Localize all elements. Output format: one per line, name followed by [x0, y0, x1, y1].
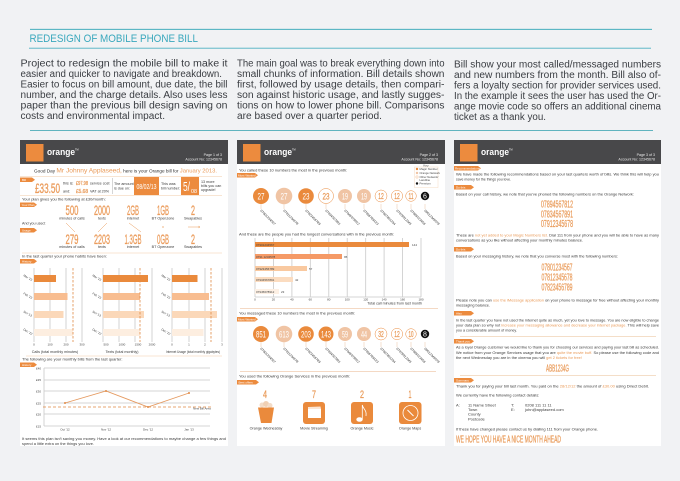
- text block: intro column 2: first, followed by usage details, then compari-: [237, 80, 444, 90]
- line chart: monthly bills: Nov '12: [101, 428, 111, 432]
- longest conversations intro: And these are the people you had the longest conversations with in the previous month:: [239, 232, 394, 236]
- bubble chart: most messaged numbers: 613: [279, 330, 289, 340]
- bubble chart: most messaged numbers: 32: [378, 330, 384, 339]
- bar chart: internet: Feb '13: [160, 291, 171, 300]
- closing text page 1: It seems this plan isn't saving you money. Have a look at our recommendations to maybe change a few things and: [22, 436, 226, 441]
- text block: intro column 3: and new numbers from the month. Bill also of-: [454, 70, 661, 81]
- bubble chart: most messaged numbers: 07911234578: [282, 347, 299, 364]
- contact details: 11 Name Street: [468, 402, 497, 408]
- line chart: monthly bills: £40: [36, 366, 41, 370]
- panel: bill page 3: WE HOPE YOU HAVE A NICE MONTH AHEAD: [456, 434, 561, 446]
- plan usage: texts: [98, 245, 106, 249]
- line chart: monthly bills: £35: [36, 378, 41, 382]
- upgrade note: upgrade!: [201, 188, 216, 192]
- tag: also: Also: [456, 312, 462, 316]
- contact details: Town: [468, 407, 477, 412]
- most messaged intro: You messaged these 10 numbers the most in the previous month:: [239, 310, 355, 316]
- contact details: 0208 111 11 11: [525, 402, 552, 408]
- bill charges: VAT at 20%: [90, 190, 110, 194]
- bubble chart: most called numbers: 23: [302, 192, 310, 202]
- bill charges: [63, 181, 110, 195]
- plan usage: 2: [191, 231, 195, 247]
- bubble chart: most messaged numbers: 07956789123: [362, 347, 380, 364]
- tag: your plan: [20, 202, 37, 207]
- bar chart: internet: [160, 268, 223, 354]
- loyalty text: We notice from your Orange Services usage that you are quite the movie buff. So please use the following code and: [456, 350, 659, 355]
- bar chart: texts: Texts (total monthly): [106, 350, 138, 354]
- bar chart: calls: Feb '13: [22, 291, 33, 300]
- bar chart: longest conversations: 57: [309, 267, 313, 271]
- header: page 3: orange: [481, 147, 509, 157]
- bubble chart: most messaged numbers: 09012345678: [423, 347, 441, 364]
- legend: key: Orange Network: [420, 171, 440, 175]
- bubble chart: most messaged numbers: 07945678912: [343, 347, 361, 364]
- header: page 1: [20, 140, 228, 164]
- imessage text: Please note you can use the iMessage application on your phone to message for free without affecting your monthly: [456, 298, 659, 302]
- contact details: E:: [511, 407, 515, 412]
- bar chart: calls: 100: [47, 342, 53, 346]
- text block: intro column 1: easier and quicker to navigate and breakdown.: [20, 69, 222, 80]
- magic numbers text: conversations as you like without affecting your monthly minutes balance.: [456, 238, 583, 242]
- plan usage: [59, 231, 202, 249]
- recommendations text: We have made the following recommendations based on your last quarters worth of bills. We think this will help you: [456, 172, 659, 176]
- header: page 3: [454, 140, 661, 164]
- bar chart: calls: 0: [33, 342, 35, 346]
- plan allowances: Swapables: [184, 216, 202, 220]
- bubble chart: most called numbers: 07967891234: [379, 209, 397, 226]
- plan usage: 2203: [94, 231, 110, 247]
- legend: key: Premium: [420, 182, 431, 186]
- service: orange wednesday: [250, 389, 283, 430]
- bar chart: longest conversations: 07901234567: [256, 243, 275, 247]
- due date: The amount: [114, 182, 134, 186]
- header: page 1: TM: [75, 148, 79, 152]
- legend: key: Landline: [420, 178, 431, 182]
- bar chart: internet: Dec '12: [160, 327, 172, 336]
- tag: also: [454, 311, 474, 316]
- service: orange wednesday: 4: [263, 389, 267, 401]
- text block: intro column 1: number, and the charge details. Also uses less: [20, 90, 228, 101]
- bubble chart: most called numbers: 27: [280, 192, 288, 202]
- plan usage: internet: [127, 245, 139, 249]
- tag: best offers: Best offers: [238, 380, 253, 384]
- text block: intro column 2: The main goal was to break everything down into: [237, 58, 445, 70]
- legend: key: Key: [423, 164, 429, 168]
- loyalty text: [456, 344, 659, 360]
- service: orange music: 2: [360, 389, 364, 401]
- bubble chart: most messaged numbers: 07978912345: [395, 347, 413, 364]
- service: movie streaming: Movie Streaming: [300, 426, 328, 430]
- text block: intro column 1: [20, 58, 228, 122]
- tag: best offers: [237, 380, 259, 384]
- loyalty text: the next Wednesday you are in the cinema you will get 2 tickets for free!: [456, 355, 582, 360]
- text block: intro column 3: Bill show your most called/messaged numbers: [454, 60, 661, 70]
- text block: intro column 1: costs and environmental impact.: [20, 111, 165, 122]
- recommendations text: save money for the things you love.: [456, 176, 511, 182]
- bar chart: texts: Jan '13: [92, 309, 102, 318]
- bill number: [161, 177, 199, 195]
- bar chart: internet: 2: [204, 342, 206, 346]
- suggested numbers 2: 07823456789: [542, 282, 573, 294]
- bar chart: internet: 1: [188, 342, 190, 346]
- used intro: And you used:: [22, 222, 46, 226]
- bubble chart: most messaged numbers: 07901234567: [259, 347, 277, 364]
- bubble chart: most messaged numbers: 07967891234: [379, 347, 397, 364]
- legend: key: [414, 164, 440, 188]
- bar chart: longest conversations: 80: [327, 298, 331, 302]
- bar chart: longest conversations: 95: [344, 255, 348, 259]
- suggested numbers 1: [541, 200, 573, 230]
- bubble chart: most messaged numbers: 07934567891: [324, 347, 342, 364]
- upgrade note: [201, 180, 221, 192]
- line chart: monthly bills: [36, 366, 212, 432]
- bar chart: longest conversations: 140: [382, 298, 387, 302]
- bar chart: internet: Jan '13: [160, 309, 171, 318]
- bubble chart: most messaged numbers: 44: [361, 330, 367, 340]
- due date: is due on:: [114, 186, 130, 190]
- plan allowances: 2000: [94, 202, 110, 218]
- header: page 3: TM: [509, 148, 513, 152]
- header: page 3: Account No: 12345678: [618, 158, 655, 162]
- plan allowances: [59, 202, 202, 220]
- bar chart: texts: [92, 268, 156, 354]
- line chart: monthly bills: £25: [36, 402, 41, 406]
- bar chart: calls: Jan '13: [22, 309, 33, 318]
- legend: key: Other Network/: [420, 175, 439, 179]
- bar chart: calls: 200: [63, 342, 69, 346]
- plan intro: Your plan gives you the following at £30/month:: [22, 196, 106, 202]
- bar chart: texts: Feb '13: [92, 291, 102, 300]
- tag: do this 1: [454, 185, 474, 190]
- due date: [114, 177, 159, 195]
- bar chart: calls: [22, 268, 85, 354]
- contact details: Postcode: [468, 416, 485, 422]
- bubble chart: most called numbers: 07989123456: [409, 209, 427, 226]
- loyalty text: As a loyal Orange customer we would like to thank you for choosing our services and paying your last bill as scheduled.: [456, 344, 659, 350]
- call history text: Based on your call history, we note that you've phoned the following numbers on the Orange Network:: [456, 192, 634, 196]
- line chart: monthly bills: Oct '12: [60, 428, 70, 432]
- bubble chart: most called numbers: 07934567891: [324, 209, 342, 226]
- bar chart: longest conversations: 07934567891: [256, 278, 275, 282]
- bubble chart: most called numbers: 11: [408, 192, 414, 201]
- internet text: In the last quarter you have not used the internet quite as much, yet you love to message. You are now eligible to change: [456, 318, 660, 322]
- internet text: [456, 318, 660, 332]
- bar chart: calls: Calls (total monthly minutes): [32, 350, 78, 354]
- service: orange music: [351, 389, 374, 430]
- suggested numbers 1: 07894567812: [541, 200, 573, 210]
- tag: summary: Summary: [456, 378, 469, 382]
- text block: intro column 2: tions on how to lower phone bill. Comparisons: [237, 100, 444, 112]
- services intro: You used the following Orange Services in the previous month:: [239, 374, 350, 378]
- service: orange maps: 1: [408, 389, 412, 401]
- bill number: 5/: [183, 179, 190, 194]
- bubble chart: most called numbers: [253, 188, 441, 226]
- bubble chart: most called numbers: 09012345678: [423, 209, 441, 226]
- bar chart: texts: 2000: [149, 342, 156, 346]
- upgrade note: 13 more: [201, 180, 215, 184]
- plan usage: 1.3GB: [124, 231, 142, 247]
- header: page 1: Account No: 12345678: [185, 158, 222, 162]
- service: movie streaming: 7: [312, 389, 316, 401]
- header: page 1: Page 1 of 3: [204, 153, 222, 157]
- contact details: A:: [456, 402, 460, 408]
- service: orange music: Orange Music: [351, 426, 374, 430]
- text block: intro column 2: son against historic usage, and lastly sugges-: [237, 90, 444, 101]
- bubble chart: most messaged numbers: 203: [301, 330, 311, 340]
- bubble chart: most called numbers: 27: [258, 192, 264, 202]
- tag: bill: [20, 178, 35, 182]
- bubble chart: most messaged numbers: 07989123456: [409, 347, 427, 364]
- tag: history: History: [22, 260, 32, 264]
- text block: intro column 2: [237, 58, 445, 122]
- bill number: 08: [191, 189, 197, 195]
- bubble chart: most messaged numbers: 8: [423, 332, 427, 338]
- tag: thank you: Thank you: [456, 340, 470, 344]
- service: movie streaming: [300, 389, 328, 430]
- header: page 2: orange: [264, 147, 292, 157]
- bar chart: longest conversations: 144: [412, 243, 417, 247]
- bubble chart: most called numbers: 23: [322, 192, 330, 202]
- contact details: T:: [511, 402, 514, 408]
- panel: bill page 3: ABB1234G: [546, 364, 569, 374]
- plan allowances: 2GB: [127, 202, 139, 218]
- text block: intro column 3: ange movie code so offers an additional cinema: [454, 102, 661, 112]
- bar chart: longest conversations: Total call minutes from last month: [367, 302, 422, 306]
- imessage text: messaging balance.: [456, 302, 490, 308]
- bubble chart: most messaged numbers: 07923456789: [304, 347, 322, 364]
- imessage text: [456, 298, 659, 308]
- title: REDESIGN OF MOBILE PHONE BILL: [30, 33, 198, 45]
- tag: usage: Usage: [22, 228, 31, 232]
- suggested numbers 2: [542, 262, 573, 294]
- tag: history 2: History: [22, 363, 32, 367]
- bar chart: longest conversations: 40: [290, 298, 294, 302]
- contact details: john@applaseed.com: [524, 407, 564, 412]
- internet text: you a considerable amount of money.: [456, 328, 517, 332]
- plan usage: 0GB: [157, 231, 169, 247]
- bar chart: longest conversations: 07945678912: [256, 290, 275, 294]
- tag: thank you: [454, 339, 474, 344]
- bill charges: and:: [63, 190, 70, 194]
- bubble chart: most messaged numbers: [253, 326, 441, 364]
- bubble chart: most called numbers: 19: [342, 192, 348, 202]
- messaging history text: Based on your messaging history, we note that you converse most with the following numbers:: [456, 254, 618, 258]
- plan usage: BT Openzone: [152, 245, 174, 249]
- magic numbers text: These are not yet added to your Magic Numbers list. Dial 111 from your phone and you will be able to have as many: [456, 232, 659, 238]
- text block: intro column 1: Easier to focus on bill amount, due date, the bill: [20, 80, 228, 90]
- line chart: monthly bills: £30: [36, 390, 41, 394]
- tag: usage: [20, 228, 37, 232]
- bill charges: service cost: [90, 182, 109, 186]
- bubble chart: most called numbers: 6: [423, 194, 427, 200]
- plan usage: Swapables: [184, 245, 202, 249]
- header: page 1: orange: [47, 147, 75, 157]
- change contact text: If these have changed please contact us by dialling 111 from your Orange phone.: [456, 426, 598, 432]
- service: orange maps: [399, 389, 422, 430]
- bubble chart: most messaged numbers: 143: [321, 330, 331, 340]
- text block: intro column 2: are based over a quarter period.: [237, 111, 382, 122]
- bubble chart: most called numbers: 12: [394, 192, 400, 201]
- bill number: This was: [161, 182, 176, 186]
- suggested numbers 1: 07912345678: [541, 219, 573, 230]
- tag: most wanted: Most Wanted: [238, 174, 256, 178]
- bar chart: longest conversations: 0: [254, 298, 256, 302]
- bar chart: longest conversations: [254, 238, 424, 306]
- plan usage: minutes of calls: [59, 245, 85, 249]
- bar chart: texts: 1000: [119, 342, 126, 346]
- plan allowances: internet: [127, 216, 139, 220]
- line chart: monthly bills: £15: [36, 424, 41, 428]
- header: page 2: TM: [292, 148, 296, 152]
- tag: most wanted 2: Most Wanted: [238, 318, 256, 322]
- panel: bill page 3: [454, 140, 661, 446]
- bubble chart: most messaged numbers: 10: [408, 330, 414, 339]
- header: page 2: Account No: 12345678: [401, 158, 438, 162]
- plan allowances: BT Openzone: [152, 216, 174, 220]
- line chart: monthly bills: Dec '12: [143, 428, 153, 432]
- service: orange wednesday: Orange Wednesday: [250, 426, 283, 430]
- bubble chart: most called numbers: 07923456789: [304, 209, 322, 226]
- text block: intro column 1: Project to redesign the mobile bill to make it: [20, 58, 228, 70]
- bills intro: The following are your monthly bills from the last quarter:: [22, 356, 122, 362]
- closing text page 1: spend a little extra on the things you love.: [22, 441, 94, 446]
- bubble chart: most messaged numbers: 851: [256, 330, 266, 340]
- plan allowances: 2: [191, 202, 195, 218]
- bubble chart: most called numbers: 07911234578: [282, 209, 299, 226]
- bar chart: texts: 500: [103, 342, 109, 346]
- tag: history: [20, 259, 37, 264]
- header: page 3: Page 3 of 3: [637, 153, 655, 157]
- internet text: your data plan so why not increase your messaging allowance and decrease your internet package. This will help save: [456, 322, 660, 328]
- bar chart: longest conversations: 160: [400, 298, 405, 302]
- bar chart: internet: 0: [171, 342, 173, 346]
- bubble chart: most messaged numbers: 12: [394, 330, 400, 339]
- bar chart: texts: Dec '12: [92, 327, 103, 336]
- upgrade note: bills you can: [201, 184, 221, 188]
- plan usage: 279: [66, 231, 79, 247]
- panel: bill page 1: [20, 140, 228, 446]
- bubble chart: most called numbers: 07956789123: [362, 209, 380, 226]
- bar chart: longest conversations: 07923456789: [256, 267, 275, 271]
- bubble chart: most called numbers: 07901234567: [259, 209, 277, 226]
- bar chart: longest conversations: 60: [309, 298, 312, 302]
- tag: bill: Bill: [22, 178, 26, 182]
- bar chart: longest conversations: 100: [345, 298, 350, 302]
- tag: recommendations: Recommendations: [455, 166, 481, 170]
- habits intro: In the last quarter your phone habits have been:: [22, 254, 107, 258]
- bubble chart: most called numbers: 07978912345: [395, 209, 413, 226]
- bar chart: calls: Dec '12: [22, 327, 34, 336]
- bar chart: longest conversations: 20: [272, 298, 275, 302]
- panel: bill page 2: [237, 140, 445, 446]
- bubble chart: most called numbers: 07945678912: [343, 209, 361, 226]
- suggested numbers 2: 07801234567: [542, 262, 573, 274]
- bar chart: longest conversations: 42: [295, 278, 299, 282]
- arrows: usage direction: [66, 223, 200, 232]
- legend: key: Magic Number: [420, 167, 438, 171]
- text block: intro column 3: ticket as a thank you.: [454, 112, 546, 123]
- bar chart: texts: Mar '13: [92, 273, 102, 282]
- bar chart: longest conversations: 120: [363, 298, 369, 302]
- tag: do this 2: [454, 247, 474, 252]
- text block: intro column 3: In the example it sees the user has used the Or-: [454, 91, 661, 102]
- bill number: bill number:: [161, 186, 180, 190]
- bill charges: this is:: [63, 182, 73, 186]
- contact details: County: [468, 412, 481, 416]
- bar chart: longest conversations: 180: [418, 298, 424, 302]
- header: page 2: [237, 140, 445, 164]
- bar chart: calls: Mar '13: [22, 273, 33, 282]
- bill charges: £5.68: [76, 189, 88, 195]
- suggested numbers 1: 07834567891: [541, 210, 573, 220]
- tag: summary: [454, 378, 474, 382]
- text block: intro column 1: paper than the previous bill design saving on: [20, 100, 228, 112]
- closing text page 1: [22, 436, 226, 446]
- magic numbers text: [456, 232, 659, 242]
- bar chart: calls: 300: [79, 342, 85, 346]
- line chart: monthly bills: New Bill Area: [193, 406, 211, 410]
- tag: do this 2: Do this: [456, 248, 466, 252]
- contact details: [456, 402, 564, 422]
- recommendations text: [456, 172, 659, 182]
- plan allowances: minutes of calls: [59, 216, 85, 220]
- bill amount: £33.50: [35, 180, 60, 196]
- tag: history 2: [20, 362, 37, 367]
- service: orange maps: Orange Maps: [399, 426, 421, 430]
- bubble chart: most messaged numbers: 59: [342, 330, 348, 340]
- bar chart: internet: Mar '13: [160, 273, 171, 282]
- most called intro: You called these 10 numbers the most in the previous month:: [239, 168, 347, 172]
- due date: 08/02/13: [136, 184, 157, 191]
- header: page 2: Page 2 of 3: [420, 153, 438, 157]
- plan allowances: texts: [98, 216, 106, 220]
- bar chart: internet: Internet Usage (total monthly gigabytes): [166, 350, 220, 354]
- contact intro: We currently have the following contact details:: [456, 392, 539, 398]
- payment text: Thank you for paying your bill last month. You paid on the 28/12/12 the amount of £30.00 using Direct Debit.: [456, 384, 649, 388]
- bill charges: £97.98: [76, 181, 88, 187]
- bar chart: longest conversations: 0791 1234578: [256, 255, 276, 259]
- text block: intro column 2: small chunks of information. Bill details shown: [237, 69, 444, 80]
- bar chart: internet: 3: [221, 342, 223, 346]
- text block: intro column 3: fers a loyalty section for provider services used.: [454, 80, 661, 92]
- bar chart: longest conversations: 23: [281, 290, 285, 294]
- bubble chart: most called numbers: 19: [361, 192, 367, 202]
- greeting: Good Day Mr Johnny Applaseed, here is your Orange bill for January 2013.: [34, 168, 218, 174]
- tag: your plan: Your Plan: [22, 203, 35, 207]
- bubble chart: most called numbers: 12: [378, 192, 384, 201]
- plan allowances: 500: [66, 202, 79, 218]
- tag: do this 1: Do this: [456, 186, 466, 190]
- suggested numbers 2: 07812345678: [542, 272, 573, 284]
- bar chart: texts: 1500: [135, 342, 142, 346]
- line chart: monthly bills: £20: [36, 412, 41, 416]
- plan allowances: 1GB: [157, 202, 169, 218]
- text block: intro column 3: [454, 60, 661, 123]
- line chart: monthly bills: Jan '13: [184, 428, 194, 432]
